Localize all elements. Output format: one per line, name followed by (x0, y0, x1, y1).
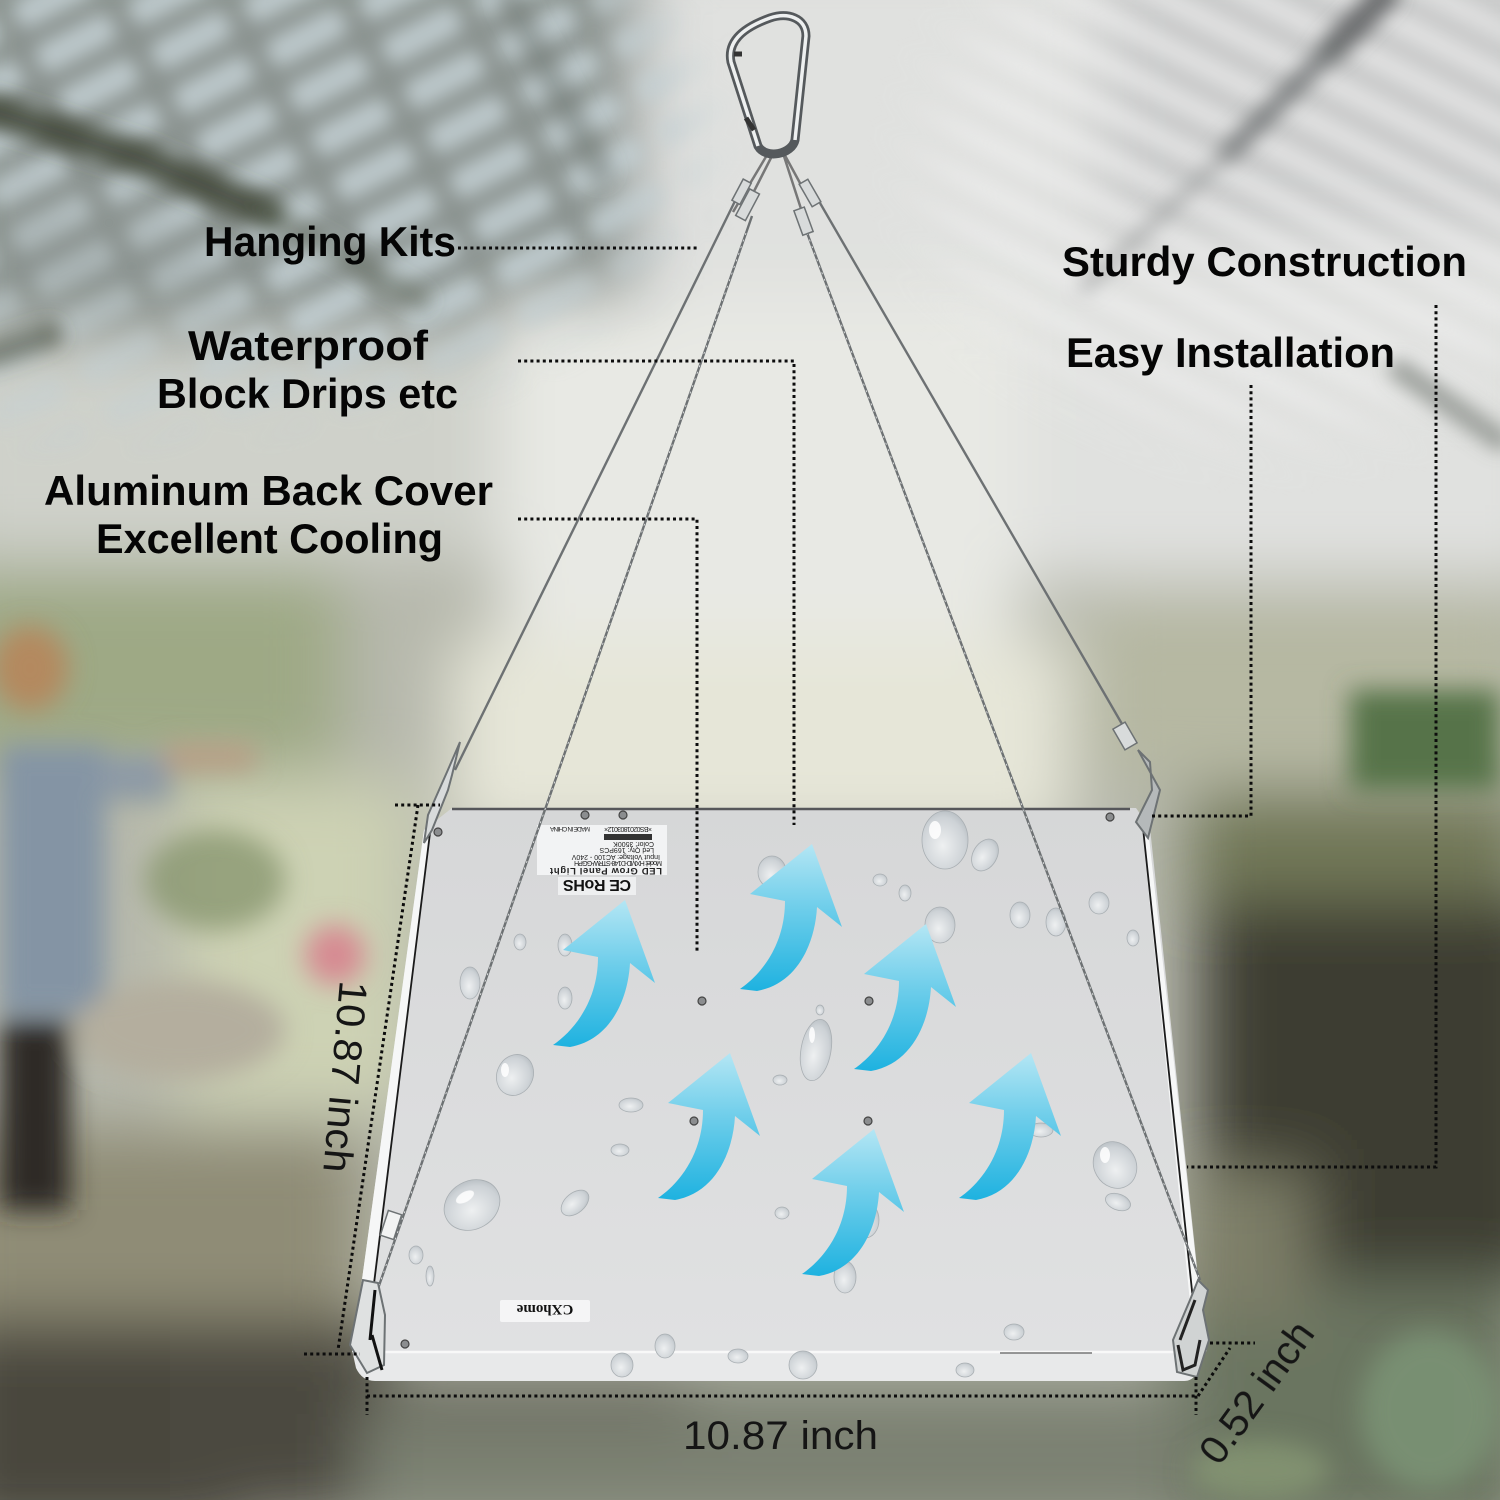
label: Aluminum Back Cover (44, 467, 493, 562)
spec label: LED Grow Panel Light (549, 865, 662, 876)
dimension: left side: 10.87 inch (314, 979, 375, 1174)
spec label: Input Voltage: AC100 - 240V (571, 853, 660, 860)
aluminum panel (352, 808, 1207, 1381)
spec label (537, 825, 667, 876)
carabiner (730, 16, 806, 154)
droplet highlights (454, 821, 1110, 1206)
arrow 2 (740, 844, 842, 991)
arrow 3 (854, 924, 956, 1071)
wire clips and hooks (350, 179, 1209, 1377)
airflow arrows (553, 844, 1061, 1276)
hanging wires (374, 150, 1200, 1300)
label: Hanging Kits: Hanging Kits (204, 218, 456, 265)
spec label: Led Qty: 169PCS (599, 846, 654, 853)
spec label: Model: HXMD-D148-STRW-GGPH (574, 859, 662, 866)
label: Easy Installation: Easy Installation (1066, 329, 1395, 376)
arrow 6 (959, 1053, 1061, 1200)
screws (401, 811, 1114, 1348)
label: Aluminum Back Cover: Excellent Cooling (96, 515, 443, 562)
spec label: ×BS0201803012× (604, 825, 652, 832)
label: Waterproof: Block Drips etc (157, 370, 458, 417)
arrow 1 (553, 900, 655, 1047)
CXhome label (500, 1300, 590, 1322)
label: Waterproof: Waterproof (188, 322, 429, 369)
spec label: Color: 3500K (613, 840, 654, 847)
leader lines (304, 248, 1436, 1415)
dimension: bottom: 10.87 inch (683, 1414, 878, 1458)
water droplets (409, 811, 1145, 1379)
spec label: MADE IN CHINA (549, 825, 590, 832)
arrow 4 (658, 1053, 760, 1200)
CXhome label: CXhome (516, 1301, 573, 1317)
arrow 5 (802, 1129, 904, 1276)
label: Aluminum Back Cover: Aluminum Back Cover (44, 467, 493, 514)
label: Waterproof (157, 322, 458, 417)
label: Sturdy Construction: Sturdy Construction (1062, 238, 1467, 285)
RoHS badge: CE RoHS (563, 876, 631, 893)
dimension: thickness: 0.52 inch (1191, 1313, 1323, 1472)
